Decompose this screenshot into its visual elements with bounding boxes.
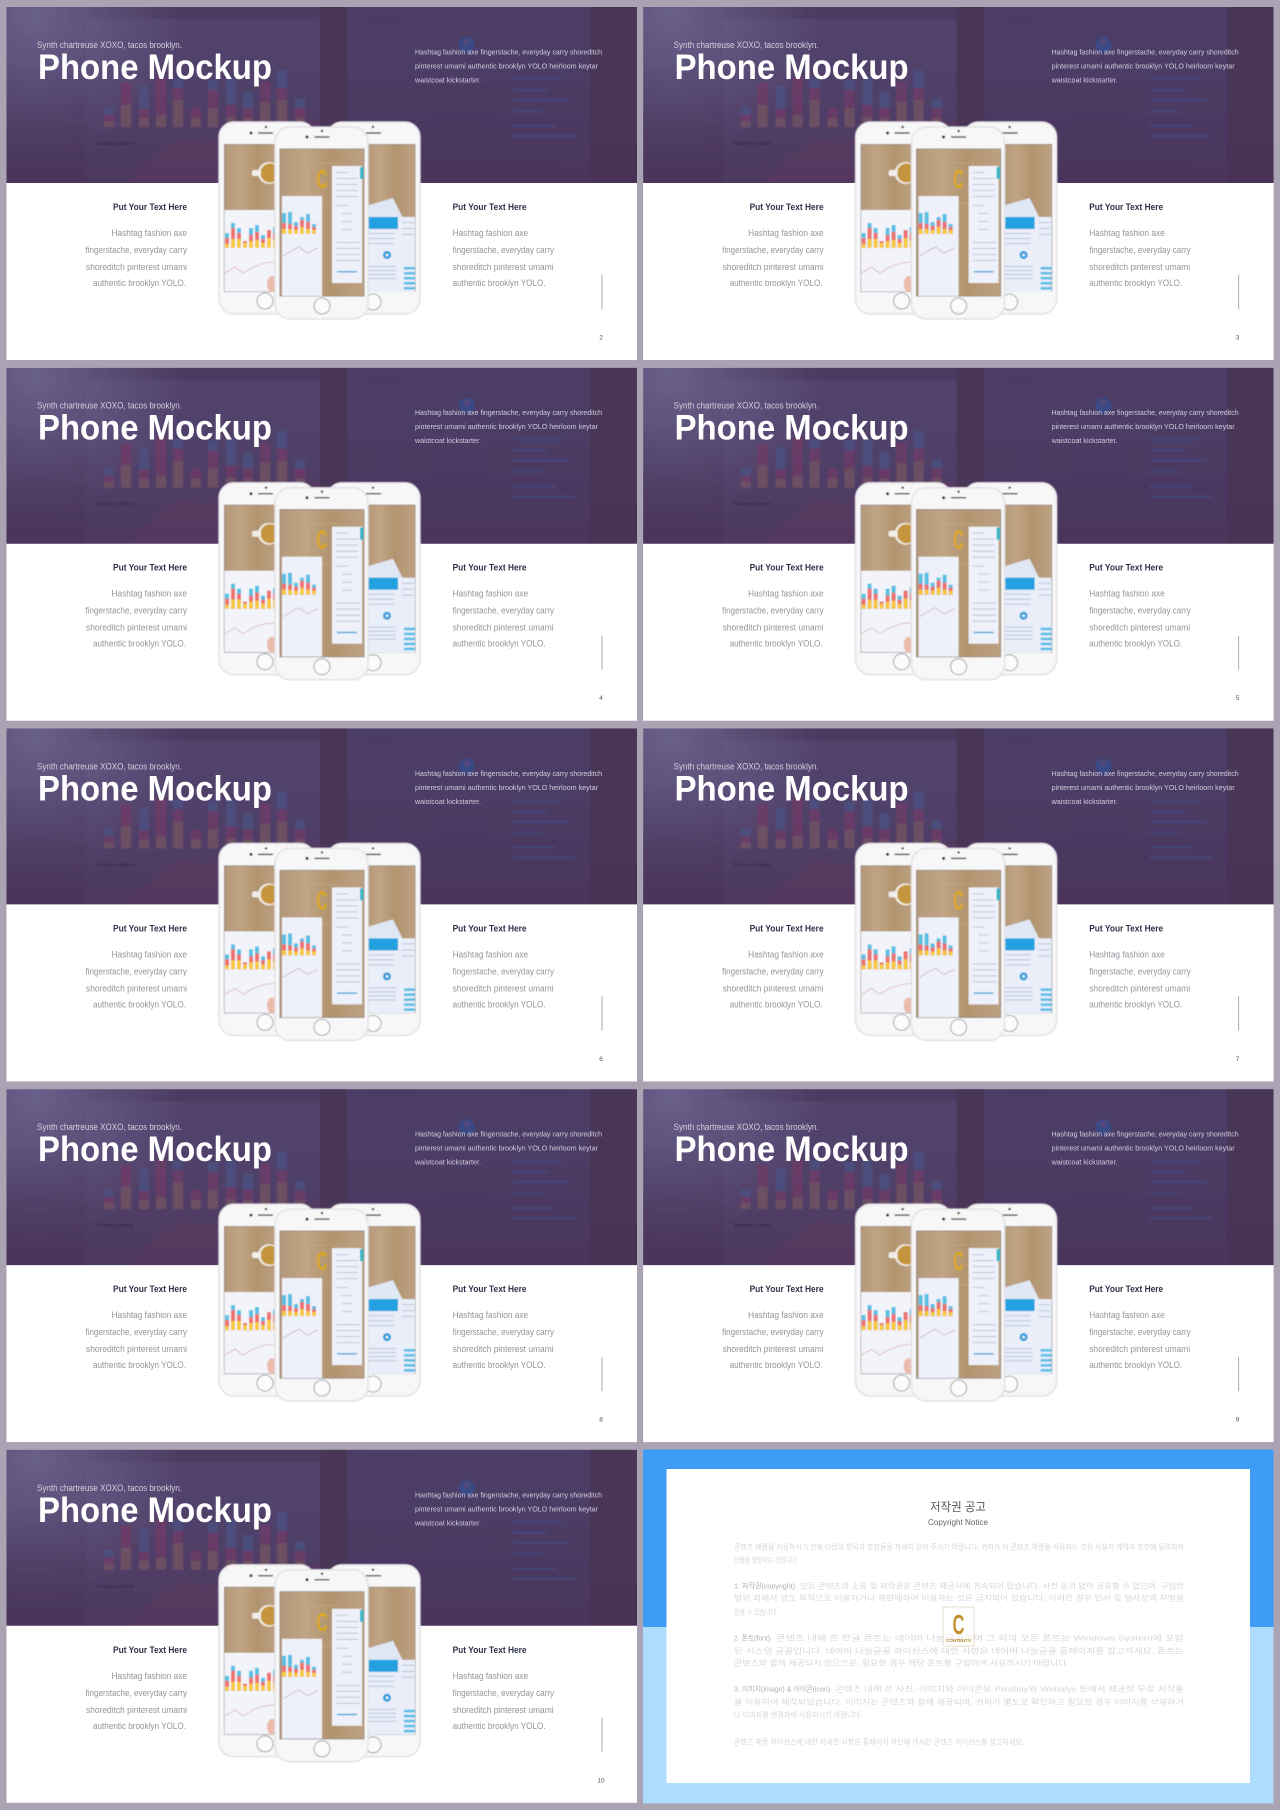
page number: 7 xyxy=(1236,1056,1240,1063)
right text block: Put Your Text Here xyxy=(1089,202,1163,213)
header paragraph: Hashtag fashion axe fingerstache, everyday carry shoreditch xyxy=(1052,1130,1239,1139)
header paragraph: pinterest umami authentic brooklyn YOLO heirloom keytar xyxy=(415,783,598,792)
header paragraph: pinterest umami authentic brooklyn YOLO heirloom keytar xyxy=(1052,422,1235,431)
purple header photo xyxy=(0,361,640,551)
right text block: shoreditch pinterest umami xyxy=(1089,983,1190,993)
purple header photo xyxy=(637,1082,1277,1272)
left text block xyxy=(86,563,187,649)
right text block: Hashtag fashion axe xyxy=(453,1310,528,1320)
right text block: Put Your Text Here xyxy=(453,1284,527,1295)
slide 4 xyxy=(0,361,640,721)
title: Phone Mockup xyxy=(38,1491,272,1530)
notice body text: 나 이미지를 변경하여 사용하시기 바랍니다. xyxy=(734,1710,862,1720)
header paragraph: Hashtag fashion axe fingerstache, everyday carry shoreditch xyxy=(415,769,602,778)
left text block: fingerstache, everyday carry xyxy=(722,966,824,976)
left text block: shoreditch pinterest umami xyxy=(86,983,187,993)
phone mockups xyxy=(219,843,420,1040)
header paragraph xyxy=(1051,408,1239,445)
right text block: shoreditch pinterest umami xyxy=(453,1705,554,1715)
phone mockups xyxy=(219,1204,420,1401)
notice body text: 을 이용하여 제작되었습니다. 이미지는 콘텐츠와 함께 제공되며, 귀하가 별도로 확인하고 필요한 경우 이미지를 삭제하거 xyxy=(734,1696,1184,1706)
header paragraph: waistcoat kickstarter. xyxy=(1051,436,1118,445)
left text block: Hashtag fashion axe xyxy=(112,228,187,238)
left text block: Hashtag fashion axe xyxy=(112,949,187,959)
left text block: Hashtag fashion axe xyxy=(748,949,824,959)
header paragraph xyxy=(414,1130,602,1167)
right text block xyxy=(453,1645,555,1731)
right text block: Hashtag fashion axe xyxy=(1089,1310,1165,1320)
title: Phone Mockup xyxy=(675,409,909,448)
title: Phone Mockup xyxy=(38,409,272,448)
header paragraph: Hashtag fashion axe fingerstache, everyday carry shoreditch xyxy=(415,408,602,417)
subtitle: Synth chartreuse XOXO, tacos brooklyn. xyxy=(674,1122,819,1132)
left text block: fingerstache, everyday carry xyxy=(722,1327,824,1337)
vertical accent bar xyxy=(1238,996,1239,1030)
left text block: Hashtag fashion axe xyxy=(748,1310,824,1320)
notice body text xyxy=(734,1542,1184,1746)
page number: 2 xyxy=(599,334,603,342)
right text block: Put Your Text Here xyxy=(453,563,527,574)
page number: 4 xyxy=(599,695,603,702)
right text block: Put Your Text Here xyxy=(453,1645,527,1656)
left text block: Hashtag fashion axe xyxy=(748,228,824,238)
left text block: authentic brooklyn YOLO. xyxy=(730,639,823,649)
right text block xyxy=(453,202,555,288)
slide 7 xyxy=(637,721,1277,1081)
header paragraph: pinterest umami authentic brooklyn YOLO heirloom keytar xyxy=(415,1144,598,1153)
page number: 10 xyxy=(597,1777,605,1784)
header paragraph: waistcoat kickstarter. xyxy=(414,436,481,445)
right text block: fingerstache, everyday carry xyxy=(453,1688,555,1698)
left text block xyxy=(86,1284,187,1370)
left text block: authentic brooklyn YOLO. xyxy=(730,1360,823,1370)
page number: 3 xyxy=(1236,334,1240,342)
slide base xyxy=(643,7,1274,360)
right text block: shoreditch pinterest umami xyxy=(1089,262,1190,272)
vertical accent bar xyxy=(1238,275,1239,309)
header paragraph: Hashtag fashion axe fingerstache, everyday carry shoreditch xyxy=(1052,769,1239,778)
vertical accent bar xyxy=(602,636,603,670)
notice body text: 콘텐츠 제품 라이선스에 대한 자세한 사항은 홈페이지 하단에 게시된 콘텐츠 라이선스를 참고하세요. xyxy=(734,1736,1024,1746)
subtitle: Synth chartreuse XOXO, tacos brooklyn. xyxy=(37,401,182,411)
left text block xyxy=(722,563,824,649)
notice heading: 저작권 공고 xyxy=(930,1500,986,1514)
left text block: fingerstache, everyday carry xyxy=(86,245,187,255)
left text block: shoreditch pinterest umami xyxy=(86,262,187,272)
notice body text: 상품을 열람하는 것입니다. xyxy=(734,1554,798,1564)
left text block xyxy=(86,1645,187,1731)
left text block: Put Your Text Here xyxy=(113,563,187,574)
right text block: authentic brooklyn YOLO. xyxy=(453,278,546,288)
left text block: fingerstache, everyday carry xyxy=(86,966,187,976)
left text block: Put Your Text Here xyxy=(750,923,824,934)
phone mockups xyxy=(856,1204,1057,1401)
title: Phone Mockup xyxy=(675,769,909,808)
slide base xyxy=(643,728,1274,1081)
right text block: shoreditch pinterest umami xyxy=(453,983,554,993)
slide base xyxy=(6,7,637,360)
subtitle: Synth chartreuse XOXO, tacos brooklyn. xyxy=(37,761,182,771)
right text block: Hashtag fashion axe xyxy=(453,228,528,238)
header paragraph xyxy=(414,1490,602,1527)
right text block: Hashtag fashion axe xyxy=(453,1671,528,1681)
notice body text: 받을 수 있습니다. xyxy=(734,1606,778,1616)
left text block: Hashtag fashion axe xyxy=(112,1310,187,1320)
left text block: fingerstache, everyday carry xyxy=(86,1688,187,1698)
left text block: Put Your Text Here xyxy=(750,1284,824,1295)
subtitle: Synth chartreuse XOXO, tacos brooklyn. xyxy=(674,40,819,50)
right text block: authentic brooklyn YOLO. xyxy=(1089,639,1182,649)
left text block: shoreditch pinterest umami xyxy=(723,623,824,633)
right text block: Hashtag fashion axe xyxy=(1089,228,1165,238)
notice body text: 모든 콘텐츠의 소유 및 저작권은 콘텐츠 제공사에 귀속되어 있습니다. 사전 동의 없이 공유할 수 없으며, 구입한 xyxy=(800,1580,1184,1590)
left text block: authentic brooklyn YOLO. xyxy=(730,278,823,288)
right text block: Hashtag fashion axe xyxy=(453,949,528,959)
header paragraph xyxy=(1051,48,1239,84)
slide base xyxy=(6,368,637,721)
slide 9 xyxy=(637,1082,1277,1442)
header paragraph: pinterest umami authentic brooklyn YOLO heirloom keytar xyxy=(1052,1144,1235,1153)
slide 8 xyxy=(0,1082,640,1442)
header paragraph: pinterest umami authentic brooklyn YOLO heirloom keytar xyxy=(1052,62,1235,70)
right text block: authentic brooklyn YOLO. xyxy=(1089,278,1182,288)
right text block: Put Your Text Here xyxy=(1089,923,1163,934)
purple header photo xyxy=(637,0,1277,190)
left text block: authentic brooklyn YOLO. xyxy=(93,639,186,649)
right text block: fingerstache, everyday carry xyxy=(453,966,555,976)
header paragraph xyxy=(1051,1130,1239,1167)
left text block: Hashtag fashion axe xyxy=(748,589,824,599)
slide 5 xyxy=(637,361,1277,721)
slide base xyxy=(643,1089,1274,1442)
slide 3 xyxy=(637,0,1277,360)
slide base xyxy=(6,728,637,1081)
phone mockups xyxy=(219,1565,420,1762)
title: Phone Mockup xyxy=(38,48,272,87)
right text block: shoreditch pinterest umami xyxy=(453,1344,554,1354)
slide 2 xyxy=(0,0,640,360)
right text block: Hashtag fashion axe xyxy=(1089,589,1165,599)
right text block: Put Your Text Here xyxy=(453,202,527,213)
purple header photo xyxy=(0,1082,640,1272)
header paragraph: Hashtag fashion axe fingerstache, everyday carry shoreditch xyxy=(1052,48,1239,56)
right text block: Hashtag fashion axe xyxy=(1089,949,1165,959)
right text block: authentic brooklyn YOLO. xyxy=(453,1360,546,1370)
left text block: Put Your Text Here xyxy=(113,1284,187,1295)
header paragraph: pinterest umami authentic brooklyn YOLO heirloom keytar xyxy=(415,62,598,70)
right text block: shoreditch pinterest umami xyxy=(1089,623,1190,633)
subtitle: Synth chartreuse XOXO, tacos brooklyn. xyxy=(674,401,819,411)
vertical accent bar xyxy=(602,996,603,1030)
right text block: shoreditch pinterest umami xyxy=(453,262,554,272)
header paragraph: Hashtag fashion axe fingerstache, everyday carry shoreditch xyxy=(1052,408,1239,417)
header paragraph: Hashtag fashion axe fingerstache, everyday carry shoreditch xyxy=(415,1490,602,1499)
right text block: fingerstache, everyday carry xyxy=(1089,245,1191,255)
header paragraph: waistcoat kickstarter. xyxy=(1051,1158,1118,1167)
page number: 8 xyxy=(599,1417,603,1424)
phone mockups xyxy=(219,122,420,319)
purple header photo xyxy=(0,0,640,190)
header paragraph xyxy=(414,408,602,445)
left text block xyxy=(722,923,824,1009)
header paragraph: waistcoat kickstarter. xyxy=(414,1158,481,1167)
right text block: authentic brooklyn YOLO. xyxy=(1089,1360,1182,1370)
vertical accent bar xyxy=(602,275,603,309)
slide base xyxy=(643,368,1274,721)
header paragraph: waistcoat kickstarter. xyxy=(414,797,481,806)
slide base xyxy=(6,1089,637,1442)
header paragraph: pinterest umami authentic brooklyn YOLO heirloom keytar xyxy=(415,422,598,431)
notice body text: 콘텐츠 내에 쓴 사진, 이미지와 아이콘은 Pixabay와 Webalys 등에서 제공한 무료 저작물 xyxy=(835,1684,1184,1694)
header paragraph: Hashtag fashion axe fingerstache, everyday carry shoreditch xyxy=(415,48,602,56)
notice body text: 콘텐츠 제품을 사용하시기 전에 다음의 항목과 조항들을 자세히 읽어 주시기 바랍니다. 귀하가 이 콘텐츠 제품을 사용하는 것은 사용자 계약과 조건에 동의하여 xyxy=(734,1542,1184,1552)
purple header photo xyxy=(0,721,640,911)
left text block: fingerstache, everyday carry xyxy=(86,1327,187,1337)
notice body text: 범위 외에서 양도 목적으로 이용하거나 재판매하여 이용하는 것은 금지되어 있습니다. 이러한 경우 민사 및 형사상의 처벌을 xyxy=(734,1592,1184,1602)
header paragraph xyxy=(414,769,602,806)
right text block: fingerstache, everyday carry xyxy=(453,245,555,255)
slide 10 xyxy=(0,1443,640,1803)
left text block xyxy=(86,202,187,288)
left text block: shoreditch pinterest umami xyxy=(723,1344,824,1354)
left text block: shoreditch pinterest umami xyxy=(86,1344,187,1354)
header paragraph: Hashtag fashion axe fingerstache, everyday carry shoreditch xyxy=(415,1130,602,1139)
left text block: Put Your Text Here xyxy=(113,923,187,934)
right text block: authentic brooklyn YOLO. xyxy=(453,999,546,1009)
left text block: authentic brooklyn YOLO. xyxy=(93,278,186,288)
logo badge: C xyxy=(952,1609,964,1640)
vertical accent bar xyxy=(1238,1357,1239,1391)
right text block: authentic brooklyn YOLO. xyxy=(1089,999,1182,1009)
left text block: shoreditch pinterest umami xyxy=(723,262,824,272)
logo badge: CONTENTS xyxy=(946,1638,971,1643)
right text block: authentic brooklyn YOLO. xyxy=(453,1721,546,1731)
notice subheading: Copyright Notice xyxy=(928,1517,988,1527)
left text block: shoreditch pinterest umami xyxy=(86,623,187,633)
notice body text: 된 시스템 글꼴입니다. 네이버 나눔글꼴 라이선스에 대한 사항은 네이버 나눔글꼴 홈페이지를 참고하세요. 폰트는 xyxy=(734,1646,1184,1656)
header paragraph: waistcoat kickstarter. xyxy=(414,76,481,84)
purple header photo xyxy=(637,361,1277,551)
left text block: Put Your Text Here xyxy=(750,563,824,574)
subtitle: Synth chartreuse XOXO, tacos brooklyn. xyxy=(674,761,819,771)
white notice card xyxy=(666,1469,1250,1783)
right text block: fingerstache, everyday carry xyxy=(1089,1327,1191,1337)
right text block xyxy=(1089,202,1191,288)
page number: 6 xyxy=(599,1056,603,1063)
left text block: authentic brooklyn YOLO. xyxy=(93,999,186,1009)
header paragraph: waistcoat kickstarter. xyxy=(414,1518,481,1527)
left text block: authentic brooklyn YOLO. xyxy=(93,1721,186,1731)
blue upper background xyxy=(643,1450,1274,1627)
title: Phone Mockup xyxy=(38,769,272,808)
phone mockups xyxy=(856,122,1057,319)
vertical accent bar xyxy=(1238,636,1239,670)
left text block: Put Your Text Here xyxy=(113,202,187,213)
left text block xyxy=(86,923,187,1009)
subtitle: Synth chartreuse XOXO, tacos brooklyn. xyxy=(37,1483,182,1493)
purple header photo xyxy=(637,721,1277,911)
left text block: authentic brooklyn YOLO. xyxy=(730,999,823,1009)
left text block: fingerstache, everyday carry xyxy=(86,606,187,616)
vertical accent bar xyxy=(602,1357,603,1391)
right text block: authentic brooklyn YOLO. xyxy=(453,639,546,649)
left text block: shoreditch pinterest umami xyxy=(723,983,824,993)
notice body text: 2. 폰트(font). xyxy=(734,1634,772,1642)
header paragraph: pinterest umami authentic brooklyn YOLO heirloom keytar xyxy=(1052,783,1235,792)
header paragraph: waistcoat kickstarter. xyxy=(1051,797,1118,806)
notice body text: 3. 이미지(image) & 아이콘(icon). xyxy=(734,1684,832,1694)
slide 6 xyxy=(0,721,640,1081)
notice body text: 1. 저작권(copyright). xyxy=(734,1580,797,1590)
right text block: fingerstache, everyday carry xyxy=(1089,966,1191,976)
right text block: Put Your Text Here xyxy=(1089,1284,1163,1295)
right text block: shoreditch pinterest umami xyxy=(453,623,554,633)
header paragraph: pinterest umami authentic brooklyn YOLO heirloom keytar xyxy=(415,1504,598,1513)
right text block: Hashtag fashion axe xyxy=(453,589,528,599)
left text block: shoreditch pinterest umami xyxy=(86,1705,187,1715)
right text block: Put Your Text Here xyxy=(1089,563,1163,574)
right text block: fingerstache, everyday carry xyxy=(453,606,555,616)
right text block: shoreditch pinterest umami xyxy=(1089,1344,1190,1354)
left text block xyxy=(722,202,824,288)
notice body text: 콘텐츠와 함께 제공되지 않으므로, 필요한 경우 해당 폰트를 구입하여 사용하시기 바랍니다. xyxy=(734,1658,1069,1668)
subtitle: Synth chartreuse XOXO, tacos brooklyn. xyxy=(37,1122,182,1132)
left text block: fingerstache, everyday carry xyxy=(722,606,824,616)
page number: 5 xyxy=(1236,695,1240,702)
right text block xyxy=(453,923,555,1009)
right text block: fingerstache, everyday carry xyxy=(1089,606,1191,616)
notice body text: 콘텐츠 내에 쓴 한글 폰트는 네이버 나눔글꼴이며 그 외의 모든 폰트는 Windows System에 포함 xyxy=(776,1632,1184,1642)
title: Phone Mockup xyxy=(675,48,909,87)
right text block xyxy=(453,563,555,649)
left text block: Hashtag fashion axe xyxy=(112,1671,187,1681)
left text block: authentic brooklyn YOLO. xyxy=(93,1360,186,1370)
left text block: Put Your Text Here xyxy=(750,202,824,213)
phone mockups xyxy=(856,483,1057,680)
left text block xyxy=(722,1284,824,1370)
left text block: Put Your Text Here xyxy=(113,1645,187,1656)
right text block xyxy=(1089,923,1191,1009)
light blue lower background xyxy=(643,1627,1274,1804)
subtitle: Synth chartreuse XOXO, tacos brooklyn. xyxy=(37,40,182,50)
purple header photo xyxy=(0,1443,640,1633)
header paragraph xyxy=(1051,769,1239,806)
right text block xyxy=(1089,563,1191,649)
left text block: fingerstache, everyday carry xyxy=(722,245,824,255)
title: Phone Mockup xyxy=(675,1130,909,1169)
left text block: Hashtag fashion axe xyxy=(112,589,187,599)
logo badge xyxy=(943,1607,974,1646)
vertical accent bar xyxy=(602,1718,603,1752)
title: Phone Mockup xyxy=(38,1130,272,1169)
phone mockups xyxy=(219,483,420,680)
right text block xyxy=(1089,1284,1191,1370)
right text block: fingerstache, everyday carry xyxy=(453,1327,555,1337)
header paragraph: waistcoat kickstarter. xyxy=(1051,76,1118,84)
header paragraph xyxy=(414,48,602,84)
slide base xyxy=(6,1450,637,1803)
page number: 9 xyxy=(1236,1417,1240,1424)
right text block xyxy=(453,1284,555,1370)
phone mockups xyxy=(856,843,1057,1040)
right text block: Put Your Text Here xyxy=(453,923,527,934)
copyright notice slide xyxy=(643,1450,1274,1804)
